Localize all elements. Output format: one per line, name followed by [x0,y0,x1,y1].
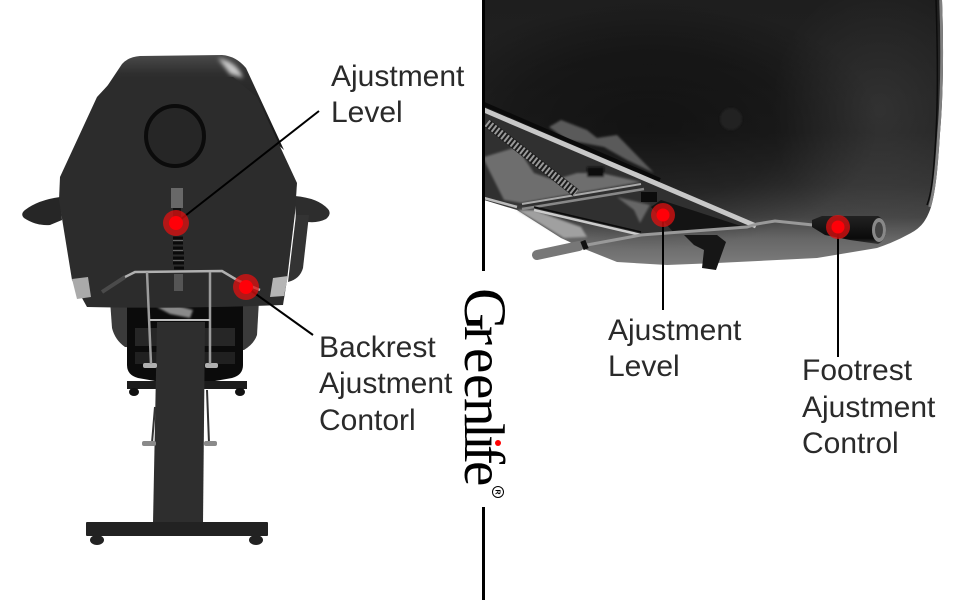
seat shading [499,0,943,235]
adjustment bracket [641,192,744,270]
panel: chair rear view [22,55,330,545]
callout: backrest adjustment level: Ajustment [331,60,465,93]
headrest top [98,55,284,150]
main chrome bar [484,104,756,226]
centre divider line [482,0,485,600]
armrests [22,196,330,282]
control bar [587,221,813,245]
callout: footrest adjustment control: Footrest [802,354,913,387]
callout: backrest adjustment control: Ajustment [319,367,453,400]
brand logo: Greenlife: Greenlife [452,288,518,486]
pedestal column and base [86,322,268,545]
callout: backrest adjustment control [233,274,453,437]
callout: backrest adjustment control: Backrest [319,331,436,364]
callout: backrest adjustment level: Level [331,96,403,129]
registered mark [492,486,504,498]
backrest panel [59,77,297,308]
callout: under-seat adjustment level [608,203,742,383]
tension spring [487,123,576,193]
left grip [537,244,587,255]
support rods [484,184,644,235]
seat underside [484,0,943,265]
callout: footrest adjustment control: Control [802,427,899,460]
logo i dot [495,437,508,448]
headrest highlight [218,58,243,78]
callout: footrest adjustment control [802,215,936,460]
head cushion oval [146,106,204,166]
callout: footrest adjustment control: Ajustment [802,391,936,424]
lower seat and frame [110,300,259,396]
callout: under-seat adjustment level: Ajustment [608,314,742,347]
callout: under-seat adjustment level: Level [608,350,680,383]
lower rods and pedals [142,363,218,446]
spring adjuster [171,188,184,291]
registered mark: R [494,490,500,495]
callout: backrest adjustment control: Contorl [319,404,416,437]
callout: backrest adjustment level [163,60,465,236]
area beneath main bar [484,108,756,235]
footrest control grip [812,216,886,244]
panel: under-seat detail view [485,0,944,270]
side brackets [72,276,288,299]
plastic wrap [484,120,654,238]
backrest control handle frame [102,271,260,364]
